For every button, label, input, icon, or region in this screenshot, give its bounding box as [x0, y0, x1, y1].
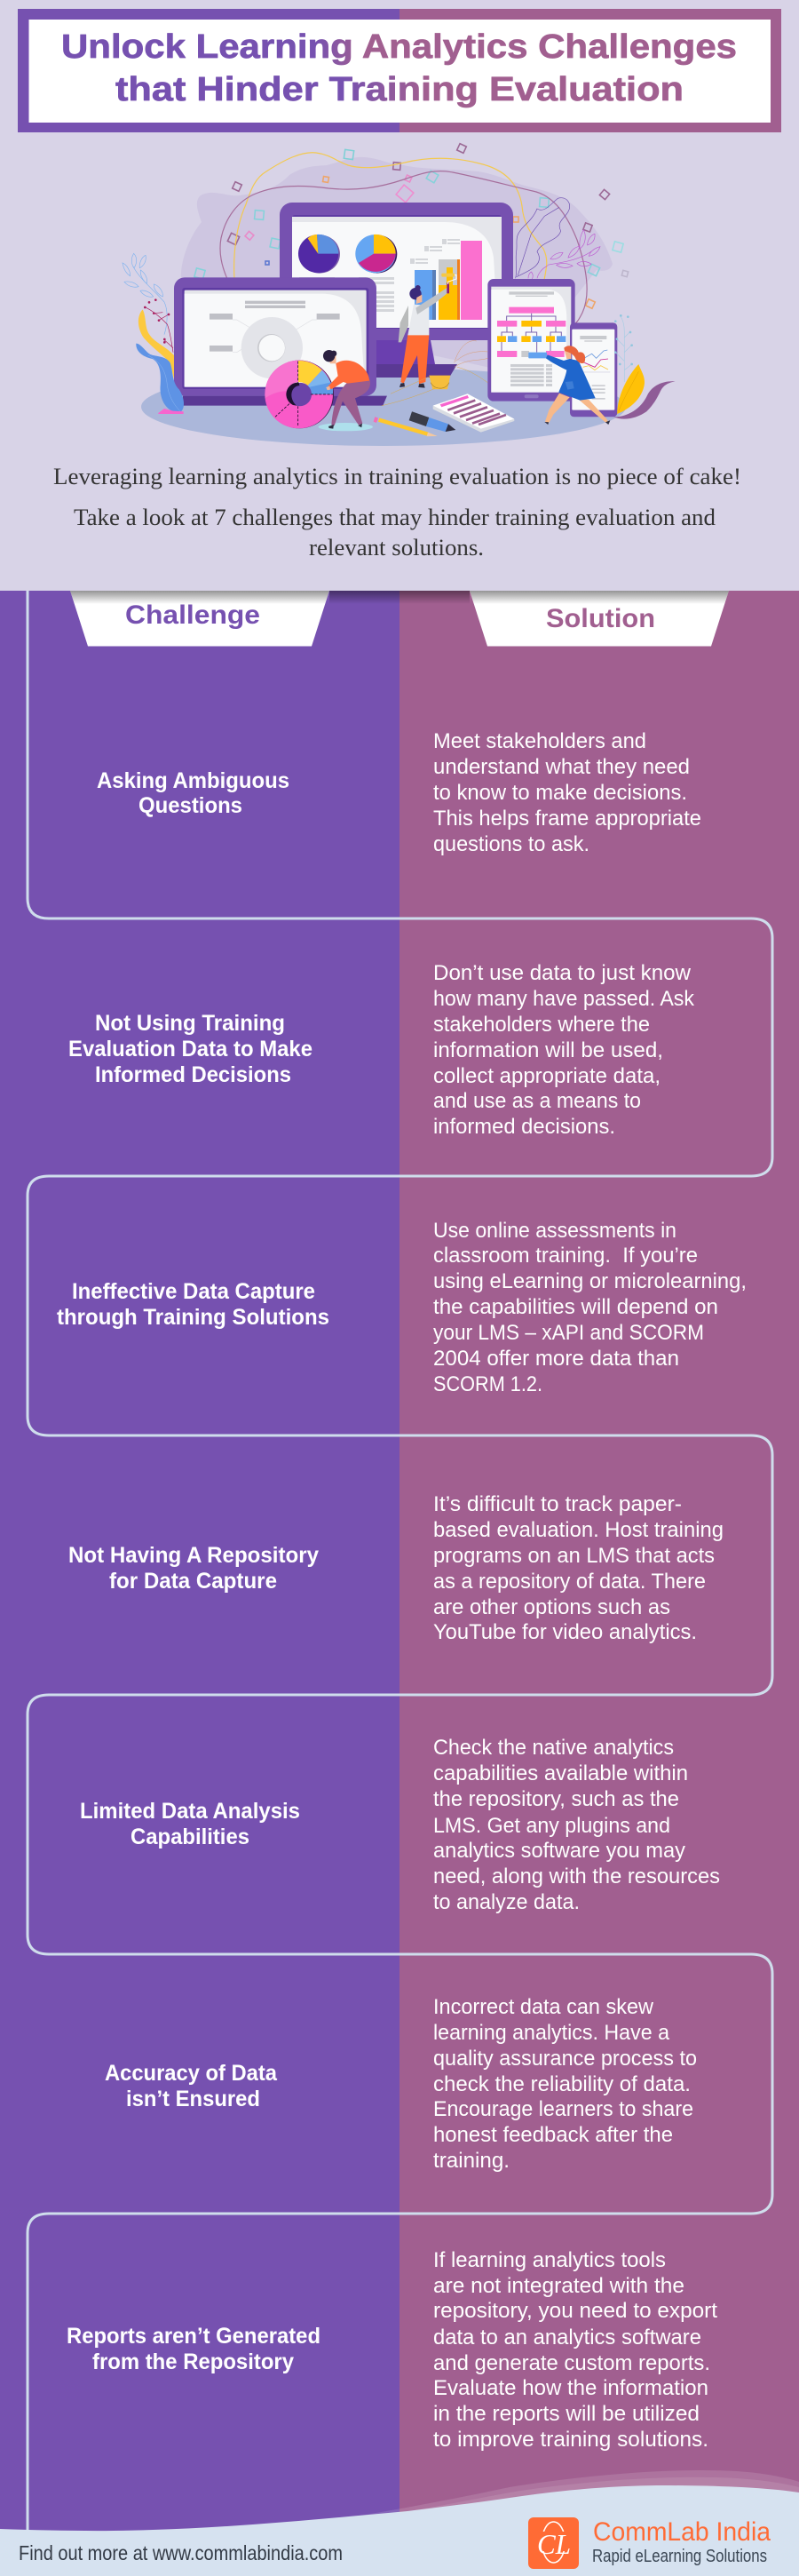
- pie chart 2: [355, 235, 397, 274]
- row 5: challenge: Limited Data Analysis: [80, 1799, 300, 1824]
- row 2: challenge: Informed Decisions: [95, 1062, 291, 1087]
- row 7: solution: and generate custom reports.: [433, 2351, 710, 2375]
- banner shadow: [329, 591, 470, 604]
- row 2: challenge: Evaluation Data to Make: [68, 1037, 312, 1061]
- red berry twig: [145, 307, 173, 353]
- plant behind tablet base: [455, 341, 487, 367]
- row 7: solution: to improve training solutions.: [433, 2428, 708, 2452]
- row 1: solution: [433, 729, 701, 856]
- column heading: Challenge: Challenge: [125, 600, 260, 630]
- column heading: Solution: [470, 591, 729, 647]
- row 1: solution: to know to make decisions.: [433, 781, 687, 805]
- solution column background: [400, 591, 799, 2576]
- row 2: solution: and use as a means to: [433, 1089, 641, 1113]
- paint bucket, pen, pencil and checklist: [374, 341, 514, 436]
- row 6: challenge: [105, 2061, 278, 2111]
- row 2: challenge: Not Using Training: [95, 1011, 285, 1036]
- row 5: solution: LMS. Get any plugins and: [433, 1814, 670, 1838]
- row 4: solution: based evaluation. Host training: [433, 1518, 724, 1542]
- person with red hair at the tablet: [544, 346, 610, 425]
- monitor text bars: [299, 239, 460, 312]
- bucket: [429, 376, 450, 389]
- row 5: solution: analytics software you may: [433, 1839, 686, 1863]
- row 6: challenge: Accuracy of Data: [105, 2061, 278, 2086]
- row 7: solution: [433, 2248, 717, 2452]
- column heading: Challenge: [70, 591, 329, 647]
- title text: that Hinder Training Evaluation: [115, 71, 684, 108]
- row 7: solution: are not integrated with the: [433, 2274, 684, 2298]
- row 3: solution: using eLearning or microlearning,: [433, 1269, 747, 1293]
- row 7: solution: Evaluate how the information: [433, 2376, 708, 2400]
- row 6: solution: learning analytics. Have a: [433, 2021, 669, 2045]
- row 4: challenge: for Data Capture: [109, 1569, 277, 1594]
- background blob: [181, 157, 613, 373]
- row 1: challenge: [97, 768, 289, 818]
- connecting rounded path through the rows: [28, 591, 772, 2540]
- row 7: solution: in the reports will be utilized: [433, 2402, 700, 2426]
- row 5: solution: need, along with the resources: [433, 1864, 720, 1888]
- row 3: solution: the capabilities will depend on: [433, 1295, 718, 1319]
- title banner: [18, 9, 781, 132]
- row 7: challenge: Reports aren’t Generated: [67, 2324, 320, 2349]
- tablet text rows: [510, 364, 552, 386]
- row 6: solution: training.: [433, 2149, 510, 2173]
- row 4: solution: are other options such as: [433, 1595, 670, 1619]
- right plants: [516, 198, 676, 419]
- CommLab India logo: CommLab India: [593, 2517, 771, 2547]
- blue leaf: [136, 344, 184, 413]
- intro text: Leveraging learning analytics in training evaluation is no piece of cake!: [53, 464, 741, 489]
- row 7: challenge: from the Repository: [92, 2349, 294, 2374]
- grey doughnut: [241, 317, 303, 378]
- CommLab India logo: Rapid eLearning Solutions: [592, 2547, 767, 2566]
- teal twig: [614, 314, 633, 382]
- row 7: solution: data to an analytics software: [433, 2326, 701, 2349]
- flowchart: [497, 307, 566, 358]
- ground ellipse: [141, 368, 626, 446]
- intro text: [53, 464, 741, 561]
- row 5: solution: Check the native analytics: [433, 1736, 674, 1760]
- row 3: challenge: Ineffective Data Capture: [72, 1279, 315, 1304]
- bar chart: [415, 241, 482, 320]
- row 6: solution: honest feedback after the: [433, 2123, 673, 2147]
- row 4: challenge: [68, 1543, 319, 1594]
- row 3: solution: 2004 offer more data than: [433, 1347, 679, 1371]
- row 7: challenge: [67, 2324, 320, 2374]
- row 2: solution: how many have passed. Ask: [433, 987, 695, 1011]
- monitor stand: [376, 340, 435, 364]
- logo badge: CL: [537, 2528, 571, 2560]
- row 4: solution: It’s difficult to track paper-: [433, 1492, 682, 1516]
- row 4: solution: programs on an LMS that acts: [433, 1544, 715, 1568]
- laptop: [174, 277, 387, 406]
- row 6: challenge: isn’t Ensured: [126, 2087, 260, 2111]
- yellow ribbon leaf: [138, 309, 174, 379]
- row 1: challenge: Questions: [138, 793, 242, 818]
- row 2: challenge: [68, 1011, 312, 1087]
- pink doughnut chart: [265, 361, 334, 428]
- row 6: solution: Incorrect data can skew: [433, 1995, 653, 2019]
- logo badge: [528, 2517, 579, 2569]
- row 3: solution: your LMS – xAPI and SCORM: [433, 1321, 704, 1345]
- row 2: solution: Don’t use data to just know: [433, 961, 691, 985]
- row 3: solution: Use online assessments in: [433, 1219, 676, 1243]
- row 7: solution: If learning analytics tools: [433, 2248, 666, 2272]
- intro text: relevant solutions.: [309, 535, 484, 561]
- left plants: [123, 253, 184, 414]
- row 4: solution: [433, 1492, 724, 1644]
- row 1: challenge: Asking Ambiguous: [97, 768, 289, 793]
- pencil: [379, 420, 429, 434]
- row 3: solution: SCORM 1.2.: [433, 1372, 542, 1396]
- illustration: analytics devices and people: [123, 144, 676, 446]
- row 3: solution: [433, 1219, 747, 1396]
- row 1: solution: This helps frame appropriate: [433, 807, 701, 831]
- CommLab India logo: [528, 2517, 771, 2569]
- person pushing the doughnut chart: [265, 350, 373, 431]
- row 5: challenge: [80, 1799, 300, 1849]
- intro text: Take a look at 7 challenges that may hinder training evaluation and: [74, 505, 716, 530]
- purple feather leaf: [613, 381, 676, 419]
- yellow leaf: [617, 364, 645, 414]
- row 6: solution: Encourage learners to share: [433, 2097, 693, 2121]
- big monitor: [280, 203, 513, 378]
- mauve decorative curve: [220, 171, 587, 325]
- phone: [570, 322, 617, 417]
- footer link text: Find out more at www.commlabindia.com: [19, 2541, 343, 2564]
- tablet: [487, 279, 575, 402]
- decorative diamonds: [194, 144, 629, 308]
- line chart: [583, 350, 610, 372]
- title text: Unlock Learning Analytics Challenges: [61, 28, 737, 66]
- yellow decorative curve: [234, 153, 547, 284]
- row 6: solution: quality assurance process to: [433, 2047, 697, 2071]
- challenge column background: [0, 591, 400, 2576]
- purple outline plant: [516, 198, 570, 278]
- row 1: solution: Meet stakeholders and: [433, 729, 646, 753]
- person painting the bar chart: [399, 274, 456, 388]
- row 7: solution: repository, you need to export: [433, 2299, 717, 2323]
- row 4: solution: as a repository of data. There: [433, 1570, 706, 1594]
- title text: [61, 28, 737, 108]
- row 3: solution: classroom training. If you’re: [433, 1244, 698, 1268]
- row 2: solution: [433, 961, 695, 1139]
- row 4: challenge: Not Having A Repository: [68, 1543, 319, 1568]
- screen heading bars: [210, 301, 340, 352]
- row 5: challenge: Capabilities: [131, 1825, 249, 1849]
- magenta outline plant: [528, 230, 600, 279]
- checklist: [433, 394, 514, 432]
- footer wave: [0, 2470, 799, 2576]
- row 6: solution: check the reliability of data.: [433, 2072, 691, 2096]
- row 2: solution: collect appropriate data,: [433, 1064, 661, 1088]
- row 4: solution: YouTube for video analytics.: [433, 1620, 697, 1644]
- row 5: solution: capabilities available within: [433, 1761, 688, 1785]
- marker: [409, 411, 429, 426]
- row 6: solution: [433, 1995, 697, 2173]
- row 5: solution: to analyze data.: [433, 1890, 580, 1914]
- row 2: solution: informed decisions.: [433, 1115, 615, 1139]
- pie chart 1: [298, 235, 340, 274]
- row 2: solution: stakeholders where the: [433, 1013, 650, 1037]
- row 3: challenge: through Training Solutions: [57, 1305, 329, 1330]
- row 3: challenge: [57, 1279, 329, 1330]
- column heading: Solution: Solution: [546, 604, 655, 633]
- outline leaves: [123, 253, 167, 335]
- row 1: solution: questions to ask.: [433, 832, 589, 856]
- row 5: solution: the repository, such as the: [433, 1787, 679, 1811]
- row 2: solution: information will be used,: [433, 1038, 663, 1062]
- row 1: solution: understand what they need: [433, 755, 690, 779]
- row 5: solution: [433, 1736, 720, 1914]
